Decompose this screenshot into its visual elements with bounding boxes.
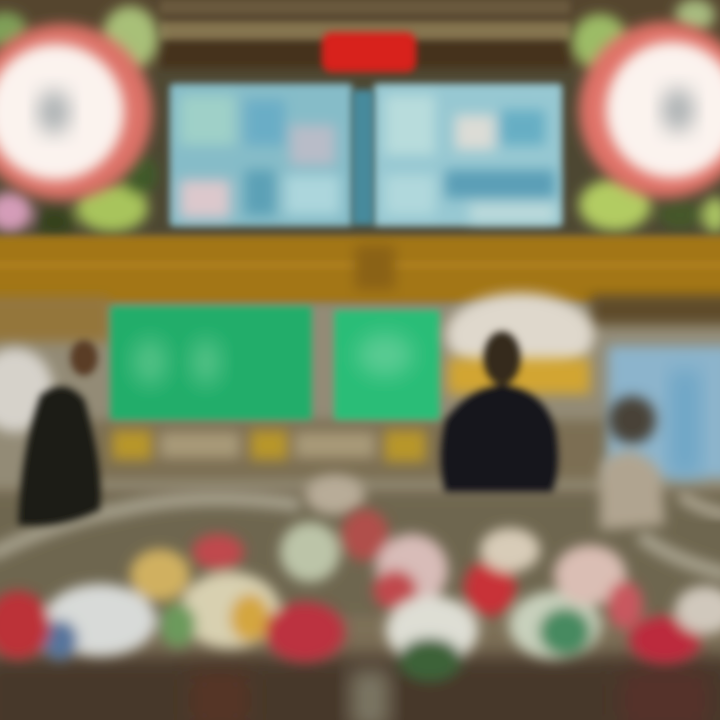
golden wooden band: [0, 236, 720, 342]
person centre right: [440, 331, 558, 492]
left clock with leaves: [0, 6, 158, 236]
right clock with leaves: [572, 0, 720, 233]
right screen: [352, 84, 562, 226]
left green panel: [110, 306, 312, 420]
lower crowd and rails: [0, 475, 720, 615]
blue panel right: [608, 346, 720, 478]
white and yellow sign: [446, 293, 594, 394]
left screen: [170, 84, 352, 226]
white panel left: [0, 348, 53, 432]
person left: [18, 340, 101, 526]
red sign: [322, 32, 416, 72]
dark bottom base: [0, 655, 720, 720]
yellow tabs under panels: [112, 430, 426, 462]
right green panel: [334, 310, 440, 420]
person far right: [600, 396, 665, 530]
colourful balls: [0, 509, 720, 682]
